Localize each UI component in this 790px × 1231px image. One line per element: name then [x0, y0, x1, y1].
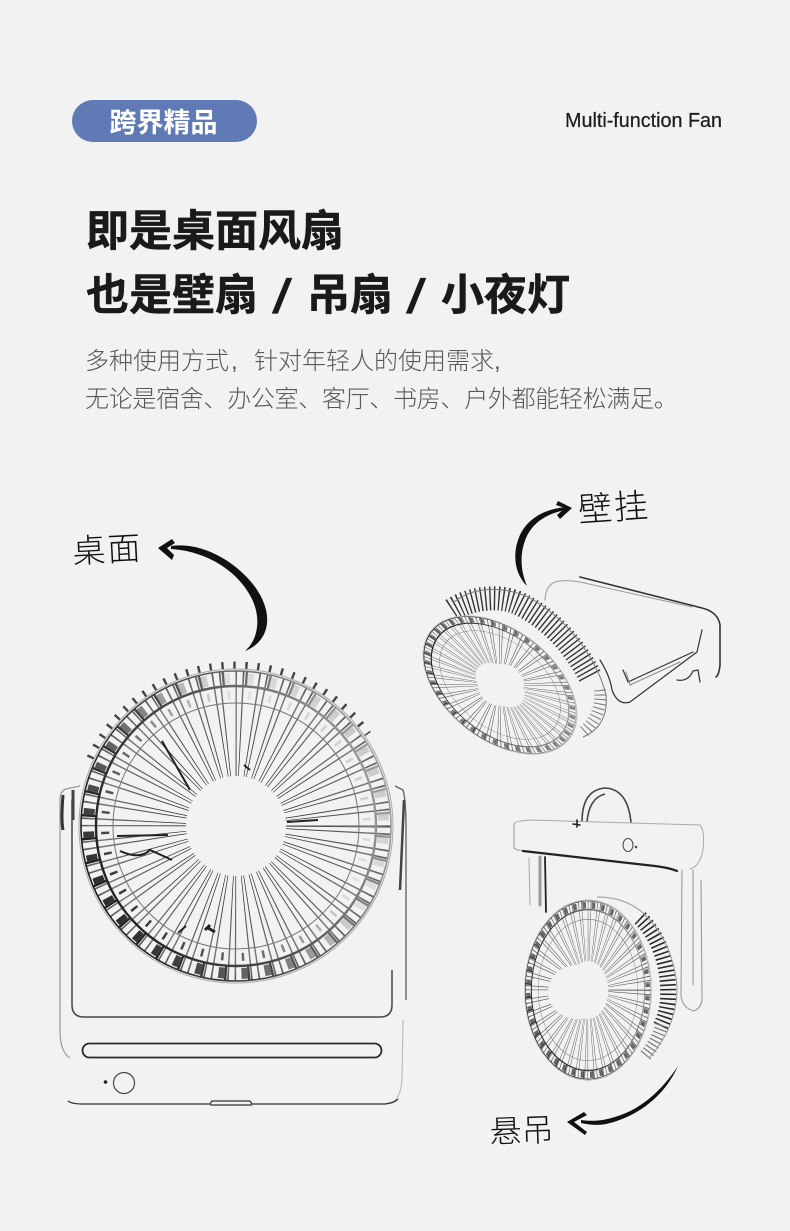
drum rim [597, 897, 677, 1057]
title: 即是桌面风扇 [86, 208, 344, 256]
subtitle text: 无论是宿舍、办公室、客厅、书房、户外都能轻松满足。 [85, 386, 678, 413]
grille [397, 588, 603, 782]
base line [68, 1099, 398, 1105]
title: / [406, 270, 426, 323]
title: 小夜灯 [441, 272, 570, 320]
badge: 跨界精品: 跨界精品 [110, 108, 218, 138]
title: 吊扇 [307, 272, 393, 320]
drum lower ribs [582, 690, 600, 733]
bracket [60, 786, 406, 1103]
drum [530, 897, 670, 1073]
drum [412, 577, 618, 773]
arrow: hanging [567, 1066, 678, 1135]
drum lower ribs [645, 1025, 662, 1056]
label: 桌面: 桌面 [71, 521, 143, 573]
drum rim [453, 589, 606, 737]
title [86, 208, 570, 323]
teeth [90, 665, 368, 758]
arms [529, 857, 702, 1011]
fan: desktop [60, 665, 406, 1105]
English label: Multi-function Fan [565, 110, 722, 132]
title: 也是壁扇 [86, 272, 258, 320]
grille [79, 669, 393, 983]
badge: 跨界精品 [72, 100, 257, 142]
subtitle text: , [494, 348, 501, 375]
subtitle text: 针对年轻人的使用需求 [254, 348, 494, 375]
top bar [514, 820, 704, 871]
fan: wall mounted [397, 577, 720, 782]
hub [478, 664, 524, 706]
subtitle text: 多种使用方式 [85, 348, 229, 375]
button [104, 1072, 134, 1094]
fan: hanging [514, 788, 704, 1080]
label: 悬吊: 悬吊 [489, 1105, 554, 1153]
drum upper ridge [640, 918, 668, 1028]
slot [82, 1044, 382, 1058]
label: 壁挂: 壁挂 [576, 478, 652, 532]
arrow: wall [515, 501, 572, 586]
drum ridge [452, 598, 590, 676]
blade marks [117, 741, 318, 933]
grille [524, 900, 652, 1080]
bracket [545, 577, 720, 703]
title: / [272, 270, 292, 323]
subtitle text [85, 348, 678, 413]
hub [548, 965, 608, 1019]
handle [582, 788, 631, 823]
subtitle text: , [231, 348, 238, 375]
arrow: desk [158, 539, 267, 651]
